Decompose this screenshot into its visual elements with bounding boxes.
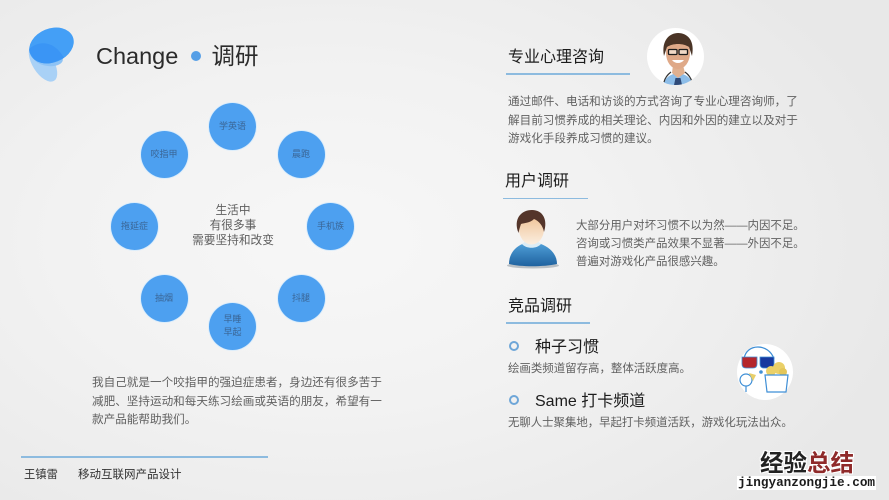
footer author: 王镇雷 — [24, 469, 58, 481]
center text: 有很多事 — [210, 218, 256, 232]
bullet: 种子习惯 — [509, 341, 519, 351]
popcorn and 3D glasses icon — [737, 344, 793, 400]
watermark url: jingyanzongjie.com — [738, 475, 875, 490]
heading rule — [503, 198, 588, 199]
title: 调研 — [212, 43, 258, 69]
circle: 晨跑: 晨跑 — [292, 148, 310, 158]
text: 种子习惯: 绘画类频道留存高，整体活跃度高。 — [508, 363, 691, 375]
center text: 生活中 — [215, 204, 251, 216]
circle: 晨跑 — [278, 130, 324, 178]
circle: 拖延症 — [111, 203, 158, 250]
footer subtitle: 移动互联网产品设计 — [78, 469, 182, 481]
heading rule — [506, 73, 630, 74]
watermark — [737, 450, 876, 490]
title: Change — [96, 43, 178, 69]
circle: 抽烟: 抽烟 — [155, 293, 173, 303]
bullet: Same — [509, 395, 519, 405]
subheading: 种子习惯: 种子习惯 — [535, 338, 599, 356]
circle: 拖延症: 拖延症 — [121, 221, 148, 231]
heading: 竞品调研: 竞品调研 — [508, 298, 572, 314]
text: Same: 无聊人士聚集地，早起打卡频道活跃，游戏化玩法出众。 — [508, 417, 793, 429]
title — [96, 43, 258, 69]
left paragraph: 款产品能帮助我们。 — [92, 413, 196, 426]
paragraph: 专业心理咨询: 解目前习惯养成的相关理论、内因和外因的建立以及对于 — [508, 114, 798, 126]
heading rule — [506, 322, 590, 324]
paragraph: 专业心理咨询: 游戏化手段养成习惯的建议。 — [508, 132, 659, 145]
left paragraph — [92, 376, 382, 426]
habit circle diagram — [110, 102, 355, 351]
circle: 咬指甲: 咬指甲 — [150, 148, 178, 158]
center text — [192, 204, 274, 246]
paragraph: 用户调研: 大部分用户对坏习惯不以为然——内因不足。 — [576, 220, 805, 232]
circle: 抖腿: 抖腿 — [292, 293, 310, 303]
left paragraph: 我自己就是一个咬指甲的强迫症患者，身边还有很多苦于 — [92, 376, 382, 389]
subheading: Same 打卡频道: Same 打卡频道 — [535, 392, 645, 410]
doctor avatar — [647, 28, 704, 85]
circle: 早睡早起: 早起 — [223, 327, 242, 337]
circle: 抽烟 — [140, 275, 188, 322]
paragraph: 用户调研: 普遍对游戏化产品很感兴趣。 — [576, 256, 725, 268]
paragraph: 用户调研 — [576, 219, 805, 268]
circle: 咬指甲 — [140, 130, 188, 178]
left paragraph: 减肥、坚持运动和每天练习绘画或英语的朋友，希望有一 — [92, 394, 382, 408]
watermark title: 经验总结 — [760, 450, 854, 476]
footer rule — [21, 456, 268, 458]
circle: 学英语 — [209, 103, 256, 150]
heading: 专业心理咨询: 专业心理咨询 — [508, 48, 604, 66]
circle: 手机族 — [307, 203, 354, 250]
center text: 需要坚持和改变 — [192, 234, 274, 246]
circle: 早睡早起 — [209, 302, 256, 350]
circle: 学英语: 学英语 — [219, 121, 246, 131]
circle: 早睡早起: 早睡 — [223, 314, 242, 324]
heading: 用户调研: 用户调研 — [505, 173, 569, 190]
user icon — [507, 210, 559, 268]
circle: 手机族: 手机族 — [317, 221, 344, 231]
logo icon — [28, 28, 74, 82]
paragraph: 用户调研: 咨询或习惯类产品效果不显著——外因不足。 — [576, 238, 805, 250]
paragraph: 专业心理咨询 — [508, 95, 798, 145]
circle: 抖腿 — [278, 275, 324, 322]
paragraph: 专业心理咨询: 通过邮件、电话和访谈的方式咨询了专业心理咨询师，了 — [508, 95, 798, 108]
